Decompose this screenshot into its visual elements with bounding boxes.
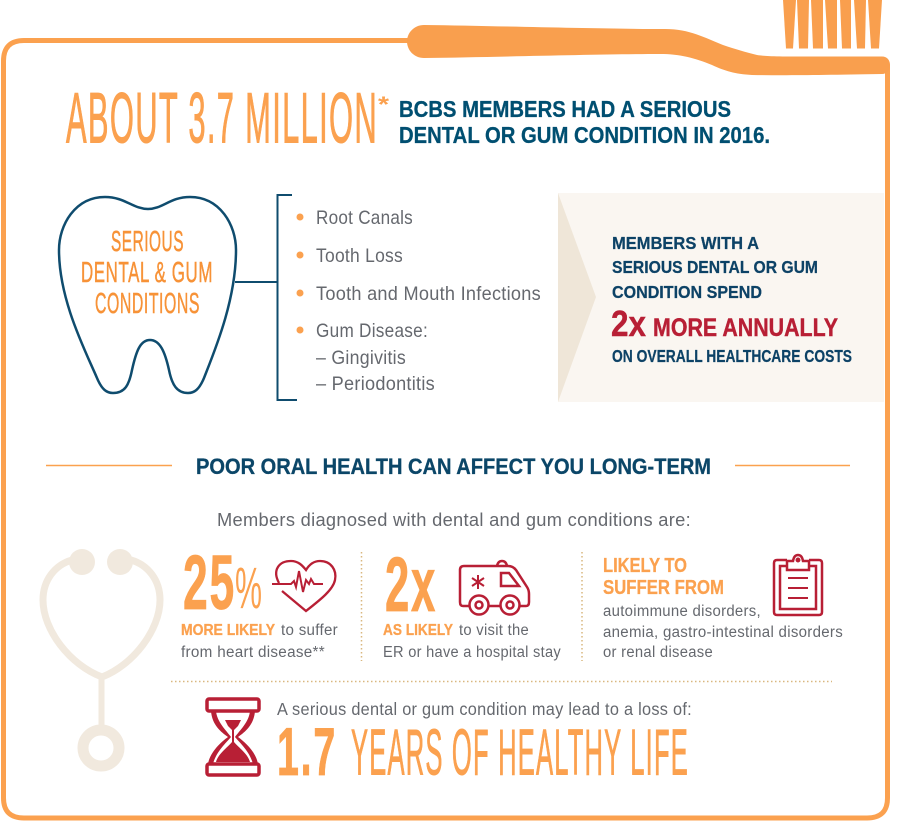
panel: annual cost callout: MORE ANNUALLY — [653, 314, 838, 342]
stat: 25 percent heart disease: MORE LIKELY — [181, 622, 276, 639]
tooth label — [81, 226, 213, 320]
toothbrush handle — [407, 25, 890, 75]
condition list: Root Canals — [316, 207, 413, 229]
stat: likely to suffer from: SUFFER FROM — [603, 577, 724, 599]
tooth diagram — [59, 197, 236, 393]
stat: 25 percent heart disease: 25 — [183, 540, 236, 626]
section heading: POOR ORAL HEALTH CAN AFFECT YOU LONG-TERM — [196, 454, 711, 479]
stat: 2x ER visits: ER or have a hospital stay — [383, 644, 561, 661]
headline: ABOUT 3.7 MILLION — [66, 80, 378, 158]
stat: likely to suffer from: LIKELY TO — [603, 555, 687, 577]
tooth label: SERIOUS — [111, 226, 184, 258]
icon: heart with pulse — [272, 561, 335, 611]
condition list: Tooth and Mouth Infections — [316, 283, 541, 305]
dotted dividers — [171, 552, 832, 682]
icon: stethoscope — [43, 549, 160, 766]
toothbrush bristles — [783, 0, 882, 48]
stat: 2x ER visits: AS LIKELY — [383, 622, 454, 639]
condition list: Gum Disease: — [316, 320, 428, 342]
headline: DENTAL OR GUM CONDITION IN 2016. — [399, 122, 770, 148]
stat: 2x ER visits — [383, 542, 561, 661]
panel: annual cost callout: 2x — [611, 303, 646, 344]
bracket connector — [235, 195, 297, 400]
tooth label: CONDITIONS — [95, 288, 200, 320]
icon: hourglass — [207, 699, 259, 775]
condition list — [296, 207, 541, 395]
stat: 25 percent heart disease: % — [235, 556, 262, 621]
panel: annual cost callout — [558, 193, 884, 402]
icon: ambulance — [460, 561, 529, 614]
tooth label: DENTAL & GUM — [81, 257, 213, 289]
panel: annual cost callout: MEMBERS WITH A — [612, 233, 759, 253]
healthy life statement: A serious dental or gum condition may lead to a loss of: — [277, 699, 692, 719]
panel: annual cost callout: SERIOUS DENTAL OR GUM — [612, 257, 818, 277]
stat: likely to suffer from: anemia, gastro-intestinal disorders — [603, 624, 843, 641]
headline: BCBS MEMBERS HAD A SERIOUS — [399, 96, 731, 122]
stat: likely to suffer from: autoimmune disorders, — [603, 603, 761, 620]
stat: 2x ER visits: to visit the — [459, 622, 529, 639]
intro text: Members diagnosed with dental and gum conditions are: — [217, 509, 691, 530]
stat: likely to suffer from: or renal disease — [603, 644, 713, 661]
headline: * — [378, 92, 390, 117]
condition list: – Gingivitis — [316, 347, 406, 369]
stat: 25 percent heart disease: to suffer — [281, 622, 338, 639]
condition list: Tooth Loss — [316, 245, 403, 267]
stat: likely to suffer from — [603, 555, 843, 661]
healthy life statement — [277, 699, 692, 790]
stat: 25 percent heart disease — [181, 540, 338, 661]
stat: 25 percent heart disease: from heart disease** — [181, 644, 325, 661]
panel: annual cost callout: CONDITION SPEND — [612, 282, 762, 302]
stat: 2x ER visits: 2x — [385, 542, 437, 628]
icon: clipboard — [774, 555, 822, 615]
healthy life statement: 1.7 — [277, 714, 337, 790]
condition list: – Periodontitis — [316, 373, 435, 395]
